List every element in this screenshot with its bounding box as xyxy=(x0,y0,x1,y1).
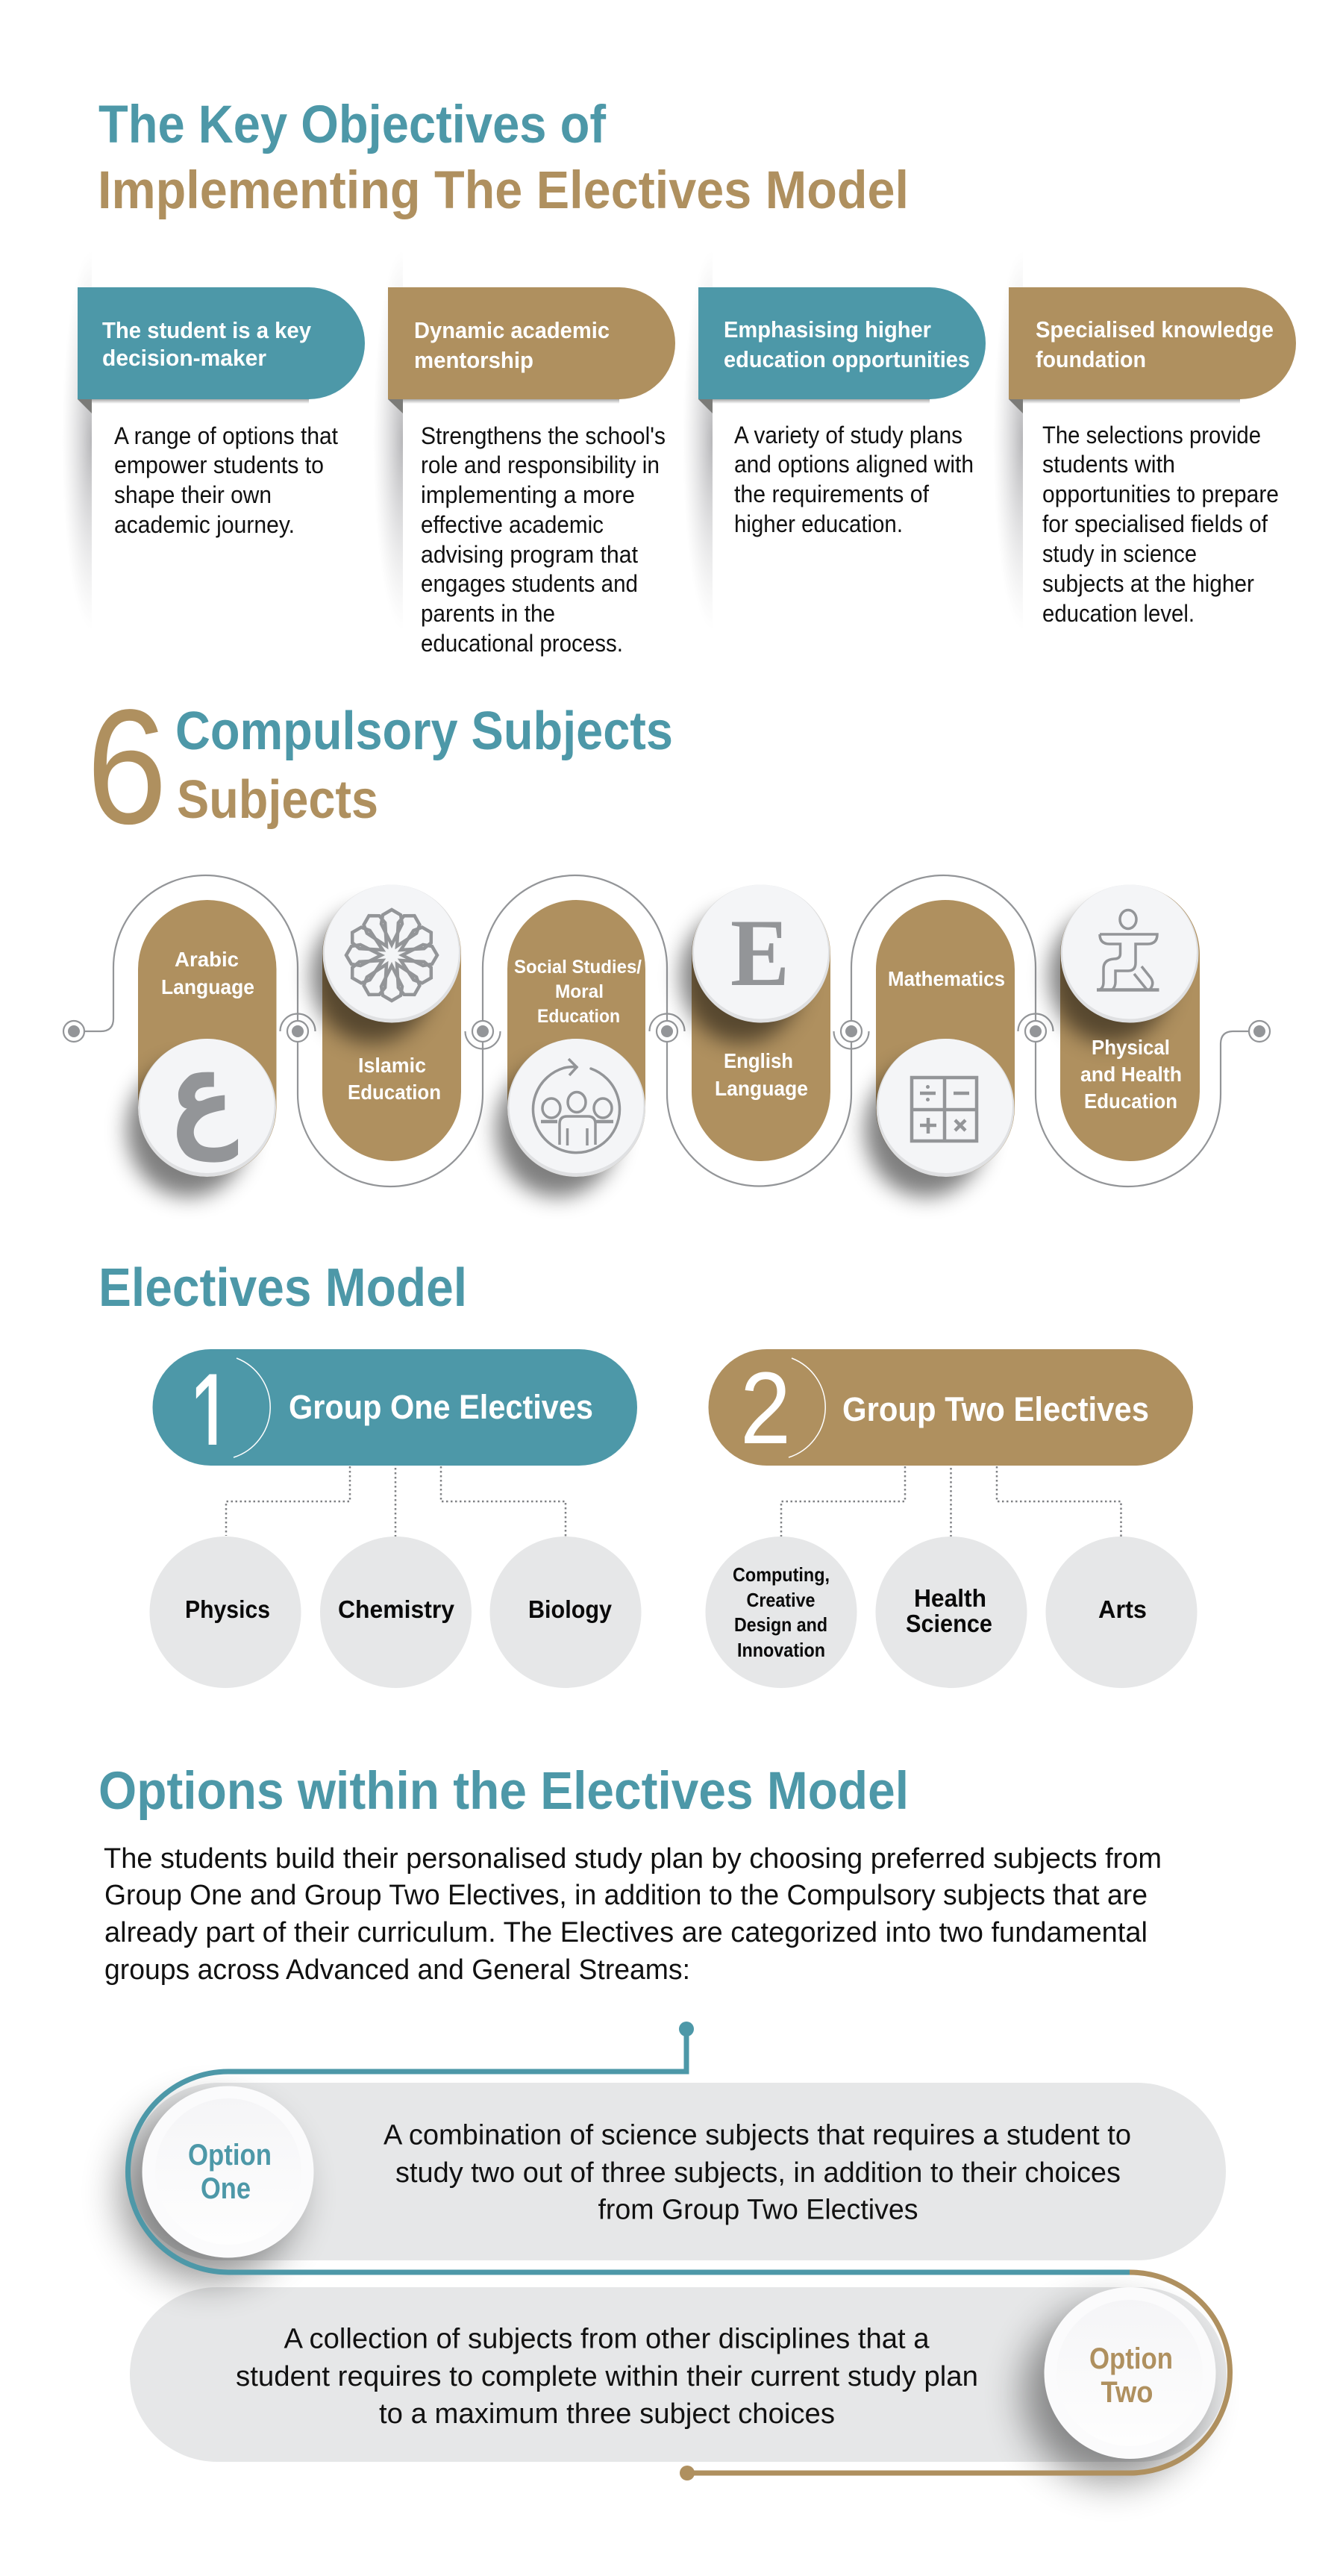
node 1 xyxy=(281,1013,315,1042)
node 3 xyxy=(649,1013,685,1042)
header: academic mentorship: mentorship xyxy=(414,347,533,373)
circle biology xyxy=(489,1536,642,1688)
node end xyxy=(1249,1021,1270,1042)
pill group one xyxy=(152,1349,637,1466)
text: objective 2 body: Strengthens the school's xyxy=(421,422,666,449)
circle physics xyxy=(149,1536,301,1688)
header: higher education opportunities: Emphasising higher xyxy=(724,316,931,343)
badge: option one: Option xyxy=(188,2139,272,2172)
subject: Arabic Language xyxy=(127,900,276,1197)
circle health science: Health xyxy=(914,1584,986,1612)
text: objective 1 body: academic journey. xyxy=(114,511,295,538)
text: objective 4 body: for specialised fields of xyxy=(1042,510,1268,537)
heading: 6 compulsory subjects: 6 xyxy=(87,676,167,858)
subject: Physical and Health Education: and Health xyxy=(1080,1063,1182,1086)
text: options intro: Group One and Group Two Electives, in addition to the Compulsory subjects that are xyxy=(104,1880,1148,1911)
text: option one description: study two out of three subjects, in addition to their choices xyxy=(395,2157,1121,2189)
badge: option one xyxy=(142,2086,313,2258)
text: objective 2 body: implementing a more xyxy=(421,481,635,508)
text: objective 4 body: education level. xyxy=(1042,600,1195,627)
text: objective 3 body: and options aligned with xyxy=(734,451,974,478)
text: objective 4 body: opportunities to prepare xyxy=(1042,481,1279,507)
circle computing: Computing, xyxy=(733,1563,830,1586)
text: option one description: from Group Two Electives xyxy=(598,2194,918,2225)
text: option two description: to a maximum three subject choices xyxy=(379,2398,835,2430)
heading: 6 compulsory subjects: Subjects xyxy=(177,770,378,830)
pill group one: Group One Electives xyxy=(289,1388,593,1426)
icon: calculator operations xyxy=(912,1078,977,1141)
title xyxy=(98,96,909,220)
subject: English Language xyxy=(680,885,830,1161)
subject: Social Studies / Moral Education xyxy=(496,900,645,1197)
circle computing: Innovation xyxy=(737,1639,825,1661)
subject: Islamic Education xyxy=(311,885,461,1161)
shadow: option two xyxy=(1024,2306,1200,2482)
group two electives xyxy=(706,1349,1197,1688)
subject: Physical and Health Education: Education xyxy=(1084,1090,1177,1113)
text: objective 4 body: students with xyxy=(1042,451,1175,478)
text: options intro: groups across Advanced and General Streams: xyxy=(104,1954,690,1986)
header: student decision-maker xyxy=(78,287,365,399)
subject: Social Studies / Moral Education: Social Studies/ xyxy=(514,957,642,978)
text: objective 1 body: empower students to xyxy=(114,451,324,478)
text: objective 2 body: parents in the xyxy=(421,600,555,627)
subject: Mathematics xyxy=(865,900,1015,1197)
pill group one: 1 xyxy=(189,1350,234,1481)
subject: Physical and Health Education: Physical xyxy=(1092,1036,1170,1059)
text: objective 2 body xyxy=(421,422,666,657)
circle arts: Arts xyxy=(1098,1595,1147,1623)
circle chemistry: Chemistry xyxy=(338,1595,455,1623)
text: objective 2 body: advising program that xyxy=(421,541,638,568)
text: objective 2 body: role and responsibility in xyxy=(421,451,660,478)
title: Implementing The Electives Model xyxy=(98,161,909,220)
panel: objective 2 xyxy=(373,251,675,657)
text: objective 4 body: subjects at the higher xyxy=(1042,570,1254,597)
icon: people in cycle xyxy=(533,1059,619,1153)
header: student decision-maker: decision-maker xyxy=(102,345,266,371)
heading: 6 compulsory subjects: Compulsory Subjects xyxy=(175,701,673,761)
arrow: teal option line xyxy=(128,2022,1130,2272)
heading: 6 compulsory subjects xyxy=(87,676,673,858)
pill group two: Group Two Electives xyxy=(842,1390,1149,1428)
text: objective 1 body xyxy=(114,422,338,538)
shadow: option one xyxy=(121,2104,297,2280)
icon: Arabic letter ain: ع xyxy=(169,1025,238,1162)
badge: option two xyxy=(1045,2287,1216,2459)
heading: electives model: Electives Model xyxy=(98,1258,467,1318)
node 4 xyxy=(834,1021,868,1049)
circle chemistry xyxy=(320,1536,472,1688)
subject: Islamic Education: Islamic xyxy=(358,1054,426,1077)
panel: objective 3 xyxy=(683,251,986,630)
badge: option two: Option xyxy=(1089,2342,1173,2375)
text: objective 2 body: effective academic xyxy=(421,511,604,538)
text: option two description: A collection of subjects from other disciplines that a xyxy=(284,2324,930,2355)
subject: Physical and Health Education xyxy=(1049,885,1200,1161)
text: options intro: The students build their personalised study plan by choosing preferred subjects from xyxy=(104,1843,1162,1875)
text: option one description: A combination of science subjects that requires a student to xyxy=(384,2119,1131,2151)
header: specialised knowledge: Specialised knowledge xyxy=(1036,316,1274,343)
text: objective 4 body xyxy=(1042,422,1279,627)
text: objective 2 body: engages students and xyxy=(421,570,638,597)
circle computing xyxy=(706,1536,857,1688)
heading: options: Options within the Electives Model xyxy=(98,1762,909,1821)
icon: exercise figure xyxy=(1097,910,1159,990)
text: objective 4 body: The selections provide xyxy=(1042,422,1261,448)
circle computing: Creative xyxy=(746,1589,815,1611)
subject: Mathematics: Mathematics xyxy=(888,967,1005,990)
icon: letter E: E xyxy=(730,899,789,1006)
badge: option two: Two xyxy=(1101,2376,1153,2409)
subject: Social Studies / Moral Education: Moral xyxy=(555,981,604,1002)
subject: Arabic Language: Language xyxy=(161,975,254,998)
header: academic mentorship: Dynamic academic xyxy=(414,317,610,343)
panel: objective 4 xyxy=(993,251,1296,630)
text: options intro xyxy=(104,1843,1162,1986)
arrow: gold option line xyxy=(680,2272,1230,2480)
node 5 xyxy=(1018,1013,1054,1042)
text: objective 3 body xyxy=(734,422,974,537)
text: objective 4 body: study in science xyxy=(1042,540,1197,567)
header: specialised knowledge: foundation xyxy=(1036,346,1146,372)
header: specialised knowledge xyxy=(1009,287,1296,399)
title: The Key Objectives of xyxy=(98,96,606,154)
text: objective 3 body: A variety of study plans xyxy=(734,422,962,448)
circle physics: Physics xyxy=(185,1595,270,1623)
header: higher education opportunities: education opportunities xyxy=(724,346,970,372)
circle health science: Science xyxy=(906,1610,992,1637)
panel: option pills background xyxy=(130,2083,1227,2462)
header: student decision-maker: The student is a key xyxy=(102,317,312,343)
subject: English Language: English xyxy=(724,1049,793,1072)
badge: option one: One xyxy=(201,2172,251,2205)
text: options intro: already part of their curriculum. The Electives are categorized into two fundamental xyxy=(104,1917,1148,1948)
text: objective 1 body: shape their own xyxy=(114,481,272,508)
subject: English Language: Language xyxy=(715,1077,808,1100)
circle computing: Design and xyxy=(734,1613,827,1636)
pill group two xyxy=(709,1349,1193,1466)
node 2 xyxy=(466,1021,500,1049)
node start xyxy=(63,1021,84,1042)
header: higher education opportunities xyxy=(698,287,986,399)
circle arts xyxy=(1046,1536,1197,1688)
connectors group two xyxy=(781,1466,1121,1539)
text: objective 1 body: A range of options that xyxy=(114,422,338,449)
text: option one description xyxy=(384,2119,1131,2225)
subject: Islamic Education: Education xyxy=(348,1081,441,1104)
circle biology: Biology xyxy=(528,1595,613,1623)
subject: Arabic Language: Arabic xyxy=(175,948,239,971)
icon: geometric rosette xyxy=(346,910,437,1001)
circle health science xyxy=(876,1536,1027,1688)
winding connector line xyxy=(63,875,1270,1187)
header: academic mentorship xyxy=(388,287,675,399)
text: objective 3 body: higher education. xyxy=(734,510,903,537)
group one electives xyxy=(149,1349,642,1688)
text: objective 3 body: the requirements of xyxy=(734,481,929,507)
text: option two description: student requires to complete within their current study plan xyxy=(236,2361,978,2392)
panel: objective 1 xyxy=(62,251,365,630)
text: option two description xyxy=(236,2324,978,2430)
connectors group one xyxy=(226,1466,566,1539)
pill group two: 2 xyxy=(740,1351,791,1466)
subject: Social Studies / Moral Education: Education xyxy=(537,1006,620,1027)
text: objective 2 body: educational process. xyxy=(421,630,623,657)
